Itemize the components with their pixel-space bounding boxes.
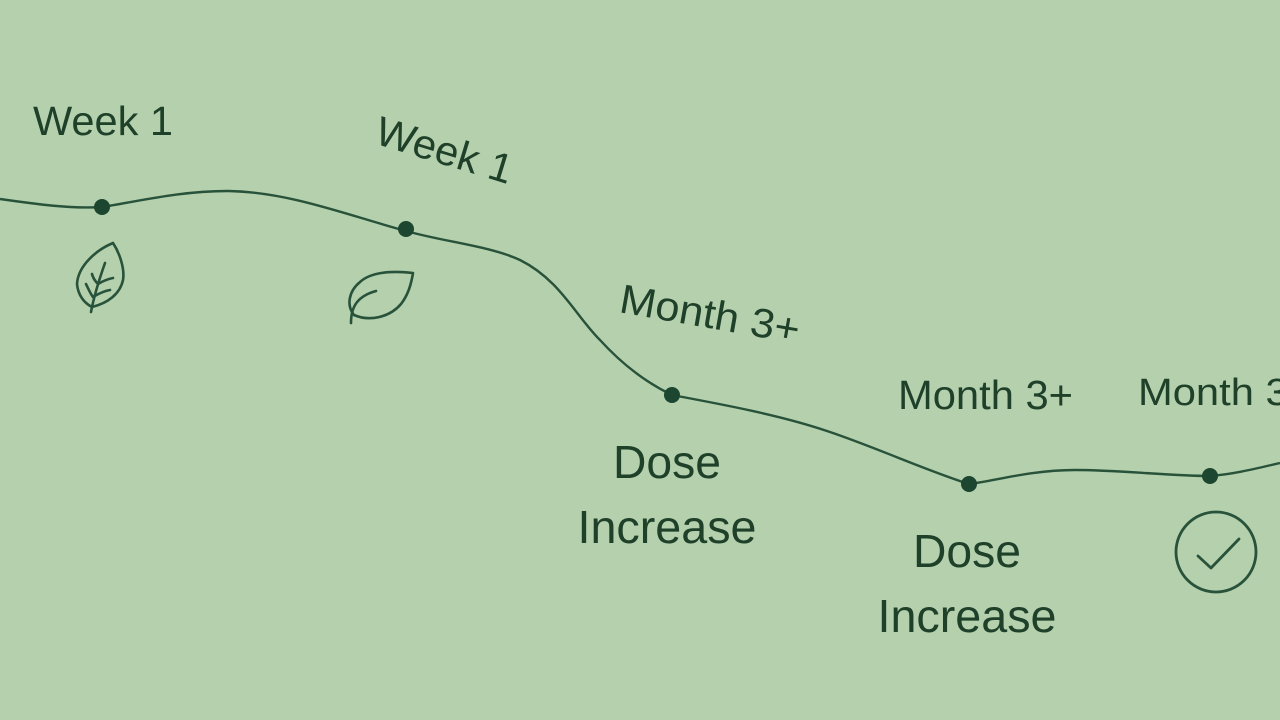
label: Dose Increase second: Dose (913, 525, 1021, 577)
label: Dose Increase second: Increase (878, 590, 1056, 642)
label: Dose Increase first: Increase (578, 501, 756, 553)
label: Month 3+ tilted: Month 3+ (616, 276, 804, 352)
icon: leaf tilted (349, 272, 413, 323)
label: Dose Increase first (578, 436, 756, 553)
label: Dose Increase first: Dose (613, 436, 721, 488)
icon: check circle (1176, 512, 1256, 592)
icon: leaf upright (77, 243, 123, 312)
timeline curve (0, 191, 1280, 484)
label: Dose Increase second (878, 525, 1056, 642)
label: Week 1 tilted: Week 1 (370, 108, 519, 193)
label: Month 3+: Month 3+ (898, 372, 1073, 418)
label: Week 1: Week 1 (33, 98, 173, 144)
milestone dots (94, 199, 1218, 492)
